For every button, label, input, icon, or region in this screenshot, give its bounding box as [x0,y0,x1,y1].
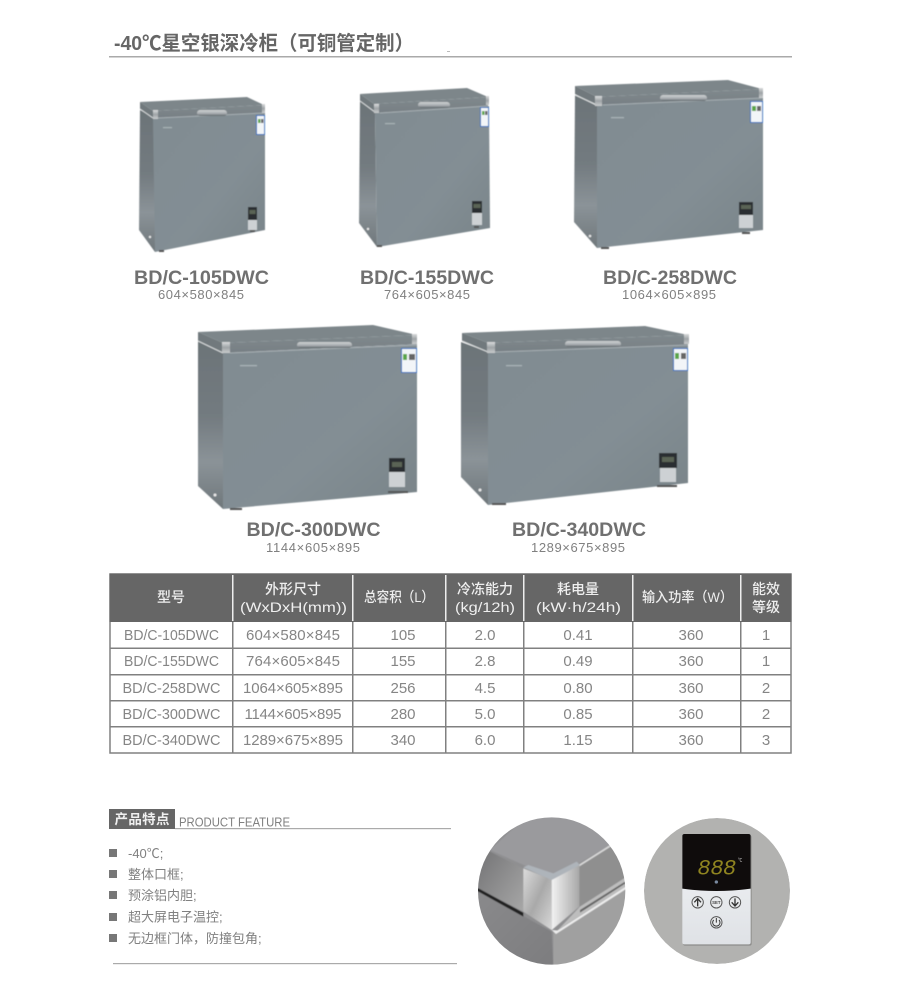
table row: BD/C-105DWC: BD/C-105DWC [124,627,219,644]
photo: digital temperature controller [644,818,790,964]
table row: BD/C-258DWC: 0.80 [563,680,593,697]
table row: BD/C-155DWC: 2.8 [475,653,495,670]
title: -40℃星空银深冷柜（可铜管定制） [114,31,414,55]
table header [110,574,792,622]
freezer: BD/C-155DWC [359,88,490,247]
feature list: 无边框门体，防撞包角; [128,931,262,946]
size: 604×580×845: 604×580×845 [158,287,244,302]
table row: BD/C-258DWC [122,680,770,697]
size: 1144×605×895: 1144×605×895 [266,540,360,555]
table header: 型号 [157,589,185,605]
feature list [109,846,262,946]
table row: BD/C-105DWC: 604×580×845 [246,627,340,644]
feature list: -40℃; [128,846,163,861]
freezer: BD/C-105DWC [139,97,265,252]
table row: BD/C-155DWC: 1 [762,653,770,670]
table row: BD/C-340DWC: BD/C-340DWC [122,732,221,749]
table row: BD/C-300DWC: BD/C-300DWC [122,706,221,723]
table row: BD/C-300DWC: 280 [390,706,416,723]
size: 1289×675×895: 1289×675×895 [531,540,625,555]
table row: BD/C-105DWC: 2.0 [475,627,495,644]
table row: BD/C-340DWC: 3 [762,732,770,749]
section heading: product feature [109,809,451,830]
feature list: 预涂铝内胆; [128,888,197,903]
table row: BD/C-258DWC: 1064×605×895 [243,680,343,697]
freezer: BD/C-300DWC [198,325,417,510]
control buttons [692,897,741,928]
table row: BD/C-105DWC: 1 [762,627,770,644]
label: BD/C-105DWC: BD/C-105DWC [134,268,269,289]
table row: BD/C-300DWC: 2 [762,706,770,723]
freezer: BD/C-258DWC [574,80,763,249]
photo: chrome corner guard [478,817,626,965]
table row: BD/C-300DWC: 1144×605×895 [244,706,342,723]
table row: BD/C-155DWC: BD/C-155DWC [124,653,219,670]
table header: (kW·h/24h) [536,599,621,615]
table row: BD/C-340DWC: 360 [678,732,704,749]
table row: BD/C-155DWC: 764×605×845 [246,653,340,670]
freezer: BD/C-340DWC [461,326,689,505]
label: BD/C-155DWC: BD/C-155DWC [360,268,494,289]
table row: BD/C-105DWC: 105 [390,627,416,644]
table row: BD/C-340DWC: 1.15 [563,732,593,749]
section heading: product feature: PRODUCT FEATURE [179,814,290,830]
table row: BD/C-155DWC: 155 [390,653,416,670]
table row: BD/C-105DWC: 0.41 [563,627,593,644]
table row: BD/C-155DWC [124,653,770,670]
table header: 冷冻能力 [457,581,513,597]
table header: (kg/12h) [455,599,515,615]
table row: BD/C-258DWC: 360 [678,680,704,697]
table header: 输入功率（W） [642,589,733,605]
table row: BD/C-300DWC: 5.0 [475,706,495,723]
table header: 能效 [752,581,780,597]
table header: 总容积（L） [364,589,434,605]
table row: BD/C-300DWC: 0.85 [563,706,593,723]
label: BD/C-258DWC: BD/C-258DWC [603,268,737,289]
table header: (WxDxH(mm)) [240,599,347,615]
table row: BD/C-340DWC: 340 [390,732,416,749]
table row: BD/C-340DWC: 6.0 [475,732,495,749]
photo: digital temperature controller: ℃ [738,858,743,863]
table row: BD/C-258DWC: 256 [390,680,416,697]
table row: BD/C-258DWC: 4.5 [475,680,495,697]
table row: BD/C-105DWC: 360 [678,627,704,644]
section heading: product feature: 产品特点 [114,811,170,827]
feature list: 整体口框; [128,867,184,882]
table row: BD/C-300DWC [122,706,770,723]
table row: BD/C-105DWC [124,627,770,644]
size: 764×605×845: 764×605×845 [384,287,470,302]
table row: BD/C-258DWC: BD/C-258DWC [122,680,221,697]
table row: BD/C-340DWC: 1289×675×895 [243,732,343,749]
table row: BD/C-155DWC: 360 [678,653,704,670]
table row: BD/C-155DWC: 0.49 [563,653,593,670]
photo: digital temperature controller: SET [712,900,721,905]
display digits: 888 [697,856,736,881]
table row: BD/C-300DWC: 360 [678,706,704,723]
table row: BD/C-340DWC [122,732,770,749]
label: BD/C-300DWC: BD/C-300DWC [246,520,381,541]
size: 1064×605×895: 1064×605×895 [622,287,716,302]
table header: 外形尺寸 [265,581,321,597]
feature list: 超大屏电子温控; [128,910,223,924]
specification table [110,574,792,753]
table header: 耗电量 [557,581,599,597]
table row: BD/C-258DWC: 2 [762,680,770,697]
label: BD/C-340DWC: BD/C-340DWC [512,520,646,541]
table header: 等级 [752,599,780,615]
